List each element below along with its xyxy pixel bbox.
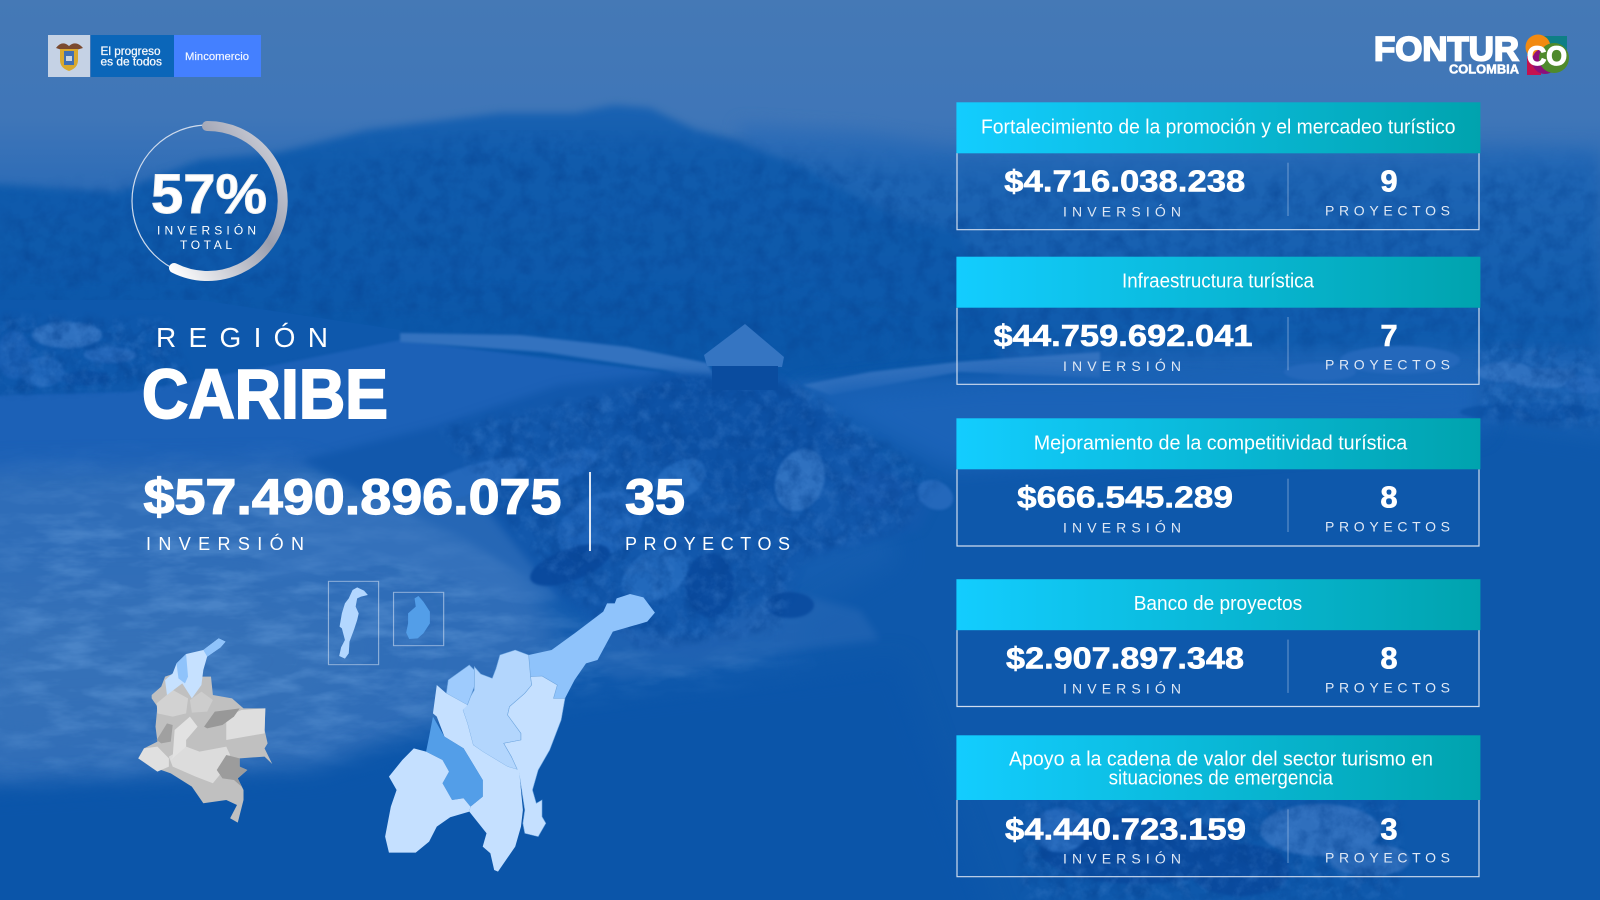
key figures: total investment and projects: $57.490.896.075 (144, 469, 562, 525)
card: Infraestructura turística: $44.759.692.041 (994, 318, 1253, 353)
card: Fortalecimiento de la promoción y el mercadeo turístico: INVERSIÓN (1063, 204, 1181, 220)
map: Colombia with Caribbean region highlighted (138, 638, 272, 823)
inset: Providencia island (394, 592, 444, 646)
heading: Región Caribe: CARIBE (142, 355, 388, 433)
icon: CO colour mark: CO (1527, 41, 1567, 71)
card: Mejoramiento de la competitividad turística: $666.545.289 (1017, 480, 1233, 515)
card: Apoyo a la cadena de valor del sector turismo en situaciones de emergencia: $4.440.723.159 (1005, 811, 1246, 846)
card: Mejoramiento de la competitividad turística: Mejoramiento de la competitividad turística (1034, 432, 1408, 454)
card: Fortalecimiento de la promoción y el mercadeo turístico: $4.716.038.238 (1004, 164, 1245, 199)
icon: coat of arms (56, 43, 83, 71)
key figures: total investment and projects: 35 (625, 469, 685, 525)
donut gauge: 57% total investment: INVERSIÓN (157, 222, 256, 238)
card: Apoyo a la cadena de valor del sector turismo en situaciones de emergencia (956, 735, 1480, 877)
donut gauge: 57% total investment: TOTAL (180, 238, 232, 252)
card: Fortalecimiento de la promoción y el mercadeo turístico: 9 (1380, 164, 1398, 199)
card: Infraestructura turística: INVERSIÓN (1063, 358, 1181, 374)
card: Banco de proyectos: 8 (1380, 641, 1398, 676)
card: Fortalecimiento de la promoción y el mercadeo turístico (956, 102, 1480, 230)
logo: Gobierno de Colombia, El progreso es de todos, Mincomercio (48, 35, 261, 77)
key figures: total investment and projects (144, 469, 790, 554)
logo: FONTUR Colombia CO: COLOMBIA (1449, 62, 1519, 76)
card: Banco de proyectos (956, 579, 1480, 706)
heading: Región Caribe: REGIÓN (156, 322, 328, 353)
logo: FONTUR Colombia CO (1374, 31, 1569, 76)
card: Mejoramiento de la competitividad turística: 8 (1380, 480, 1398, 515)
card: Mejoramiento de la competitividad turística: INVERSIÓN (1063, 520, 1181, 536)
logo: Gobierno de Colombia, El progreso es de todos, Mincomercio: El progreso (100, 44, 161, 58)
logo: Gobierno de Colombia, El progreso es de todos, Mincomercio: Mincomercio (185, 51, 249, 63)
card: Apoyo a la cadena de valor del sector turismo en situaciones de emergencia: PROYECTOS (1325, 849, 1450, 865)
donut gauge: 57% total investment: 57% (151, 162, 267, 225)
card: Banco de proyectos: Banco de proyectos (1134, 593, 1302, 615)
heading: Región Caribe (142, 322, 388, 433)
card: Mejoramiento de la competitividad turística (956, 418, 1480, 546)
map: Caribbean region departments (385, 594, 655, 872)
card: Apoyo a la cadena de valor del sector turismo en situaciones de emergencia: INVERSIÓN (1063, 850, 1181, 866)
card: Apoyo a la cadena de valor del sector turismo en situaciones de emergencia: situaciones de emergencia (1109, 767, 1334, 789)
card: Fortalecimiento de la promoción y el mercadeo turístico: Fortalecimiento de la promoción y el mercadeo turístico (981, 116, 1456, 138)
card: Banco de proyectos: INVERSIÓN (1063, 681, 1181, 697)
inset: San Andrés island (328, 581, 379, 665)
photo detail: thatched hut (704, 324, 784, 390)
card: Infraestructura turística: 7 (1380, 318, 1398, 353)
card: Infraestructura turística: Infraestructura turística (1122, 271, 1315, 293)
card: Banco de proyectos: PROYECTOS (1325, 679, 1450, 695)
card: Infraestructura turística (956, 257, 1480, 384)
card: Fortalecimiento de la promoción y el mercadeo turístico: PROYECTOS (1325, 202, 1450, 218)
card: Banco de proyectos: $2.907.897.348 (1006, 641, 1244, 676)
card: Apoyo a la cadena de valor del sector turismo en situaciones de emergencia: Apoyo a la cadena de valor del sector turismo en (1009, 749, 1433, 771)
icon: CO colour mark (1526, 34, 1569, 75)
key figures: total investment and projects: INVERSIÓN (146, 533, 304, 554)
logo: Gobierno de Colombia, El progreso es de todos, Mincomercio: es de todos (100, 54, 162, 68)
donut gauge: 57% total investment (132, 125, 284, 277)
logo: FONTUR Colombia CO: FONTUR (1374, 31, 1519, 69)
card: Mejoramiento de la competitividad turística: PROYECTOS (1325, 518, 1450, 534)
card: Infraestructura turística: PROYECTOS (1325, 357, 1450, 373)
card: Apoyo a la cadena de valor del sector turismo en situaciones de emergencia: 3 (1380, 811, 1398, 846)
key figures: total investment and projects: PROYECTOS (625, 534, 790, 554)
